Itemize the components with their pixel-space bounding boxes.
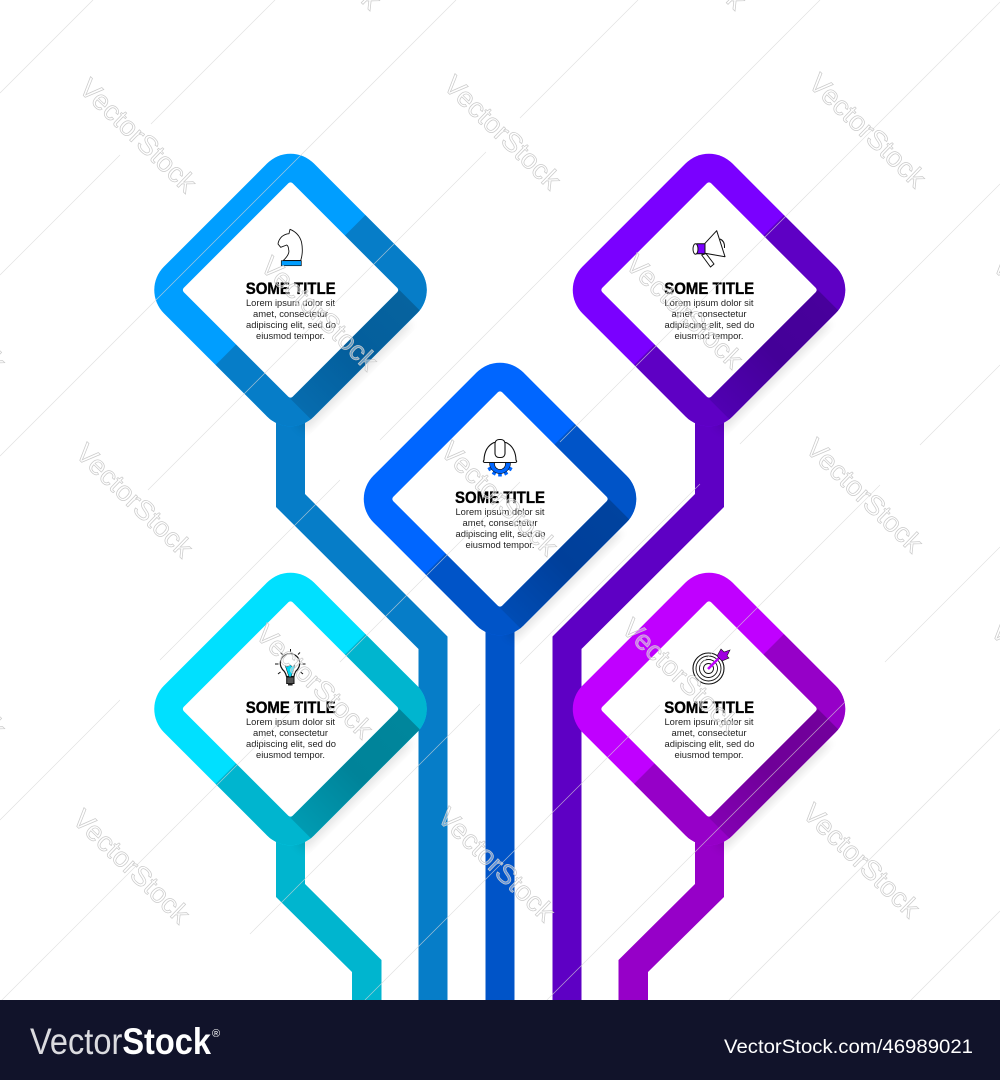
panel: top-left diamond xyxy=(154,154,427,431)
icon: helmet and gear xyxy=(483,440,517,476)
text block xyxy=(664,717,754,761)
footer bar xyxy=(0,1000,1000,1080)
icon: target with arrow xyxy=(693,649,730,684)
text block: adipiscing elit, sed do xyxy=(664,739,754,750)
text block: adipiscing elit, sed do xyxy=(664,320,754,331)
text block: amet, consectetur xyxy=(462,518,538,529)
heading: SOME TITLE xyxy=(455,489,545,507)
footer logo: VectorStock xyxy=(30,1021,211,1062)
heading: SOME TITLE xyxy=(246,280,336,298)
heading: SOME TITLE xyxy=(664,699,754,717)
text block: Lorem ipsum dolor sit xyxy=(246,298,335,309)
watermarks: VectorStock xyxy=(73,73,202,199)
watermarks: VectorStock xyxy=(620,249,749,375)
watermarks: VectorStock xyxy=(250,619,379,745)
text block: amet, consectetur xyxy=(253,309,329,320)
watermarks: VectorStock xyxy=(803,68,932,194)
watermarks: VectorStock xyxy=(797,798,926,924)
text block xyxy=(664,298,754,342)
watermarks: VectorStock xyxy=(432,802,561,928)
icon: light bulb xyxy=(275,649,306,686)
text block: amet, consectetur xyxy=(672,309,747,320)
footer id: VectorStock.com/46989021 xyxy=(724,1036,973,1058)
text block: Lorem ipsum dolor sit xyxy=(246,717,335,728)
text block: eiusmod tempor. xyxy=(674,750,744,761)
panel: bottom-right diamond xyxy=(572,572,846,850)
stem: violet branch xyxy=(552,410,724,1000)
panel: bottom-left diamond xyxy=(154,572,427,850)
text block xyxy=(246,298,336,342)
text block: adipiscing elit, sed do xyxy=(456,529,546,540)
icon: chess knight xyxy=(278,229,302,266)
heading: SOME TITLE xyxy=(246,699,336,717)
watermarks: VectorStock xyxy=(616,613,745,739)
text block xyxy=(246,717,336,761)
text block: eiusmod tempor. xyxy=(256,750,325,761)
text block: Lorem ipsum dolor sit xyxy=(664,298,754,309)
registered mark: ® xyxy=(212,1028,220,1040)
text block: amet, consectetur xyxy=(253,728,329,739)
watermarks: VectorStock xyxy=(800,433,929,559)
stem: centre branch xyxy=(486,610,514,1000)
text block: eiusmod tempor. xyxy=(256,331,325,342)
stem: blue branch xyxy=(276,410,448,1000)
stem: magenta branch xyxy=(618,830,724,1000)
text block: amet, consectetur xyxy=(672,728,747,739)
watermarks: VectorStock xyxy=(255,251,384,377)
panel: top-right diamond xyxy=(572,154,846,431)
heading: SOME TITLE xyxy=(664,280,754,298)
text block: adipiscing elit, sed do xyxy=(246,320,336,331)
icon: megaphone xyxy=(693,231,725,267)
watermarks: VectorStock xyxy=(435,436,564,562)
watermarks: VectorStock xyxy=(438,70,567,196)
text block: eiusmod tempor. xyxy=(466,540,534,551)
text block: Lorem ipsum dolor sit xyxy=(456,507,545,518)
text block: Lorem ipsum dolor sit xyxy=(664,717,754,728)
text block: adipiscing elit, sed do xyxy=(246,739,336,750)
panel: centre diamond xyxy=(364,362,636,640)
watermarks: VectorStock xyxy=(67,804,196,930)
text block: eiusmod tempor. xyxy=(674,331,744,342)
text block xyxy=(456,507,546,551)
stem: cyan branch xyxy=(276,830,382,1000)
watermarks: VectorStock xyxy=(70,438,199,564)
